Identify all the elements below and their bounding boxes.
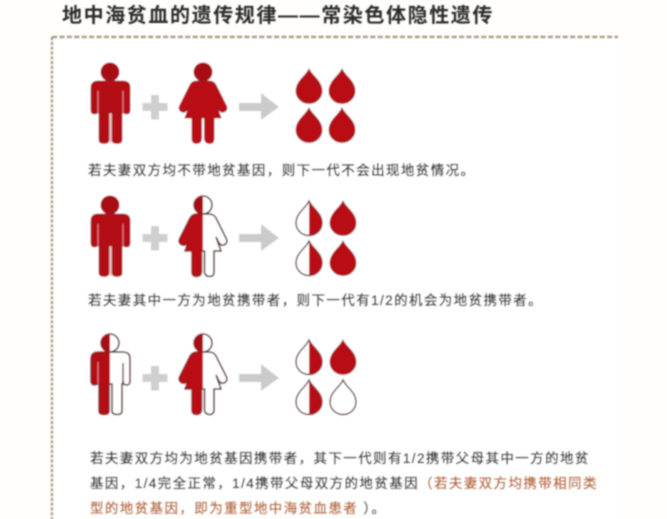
icon: father, no gene	[91, 196, 130, 276]
icon: mother, no gene	[179, 62, 227, 144]
icon: mixed drops	[296, 340, 356, 414]
icon: mother, carrier	[179, 334, 227, 414]
icon: four full drops	[296, 69, 355, 142]
row 1: both parents non-carriers	[88, 62, 475, 178]
icon: arrow	[239, 93, 279, 120]
caption row 3: 基因，1/4完全正常，1/4携带父母双方的地贫基因（若夫妻双方均携带相同类	[90, 475, 598, 491]
caption row 2: 若夫妻其中一方为地贫携带者，则下一代有1/2的机会为地贫携带者。	[88, 293, 543, 308]
caption row 3	[90, 450, 598, 516]
icon: plus sign	[142, 95, 168, 120]
caption row 3: 型的地贫基因，即为重型地中海贫血患者 ）。	[90, 500, 386, 516]
caption row 3: 若夫妻双方均为地贫基因携带者，其下一代则有1/2携带父母其中一方的地贫	[90, 450, 590, 466]
icon: mother, carrier	[179, 196, 227, 276]
icon: plus sign	[142, 226, 168, 250]
row 2: one parent carrier	[88, 196, 543, 308]
icon: plus sign	[142, 366, 168, 390]
icon: father, carrier	[91, 334, 130, 414]
icon: arrow	[239, 364, 279, 391]
caption row 1: 若夫妻双方均不带地贫基因，则下一代不会出现地贫情况。	[88, 162, 475, 178]
icon: arrow	[239, 224, 279, 251]
icon: two half and two full drops	[296, 201, 356, 276]
row 3: both parents carriers	[90, 334, 598, 516]
title: 地中海贫血的遗传规律——常染色体隐性遗传	[62, 4, 494, 27]
icon: father, no gene	[91, 62, 130, 144]
panel: dashed frame	[52, 37, 618, 519]
